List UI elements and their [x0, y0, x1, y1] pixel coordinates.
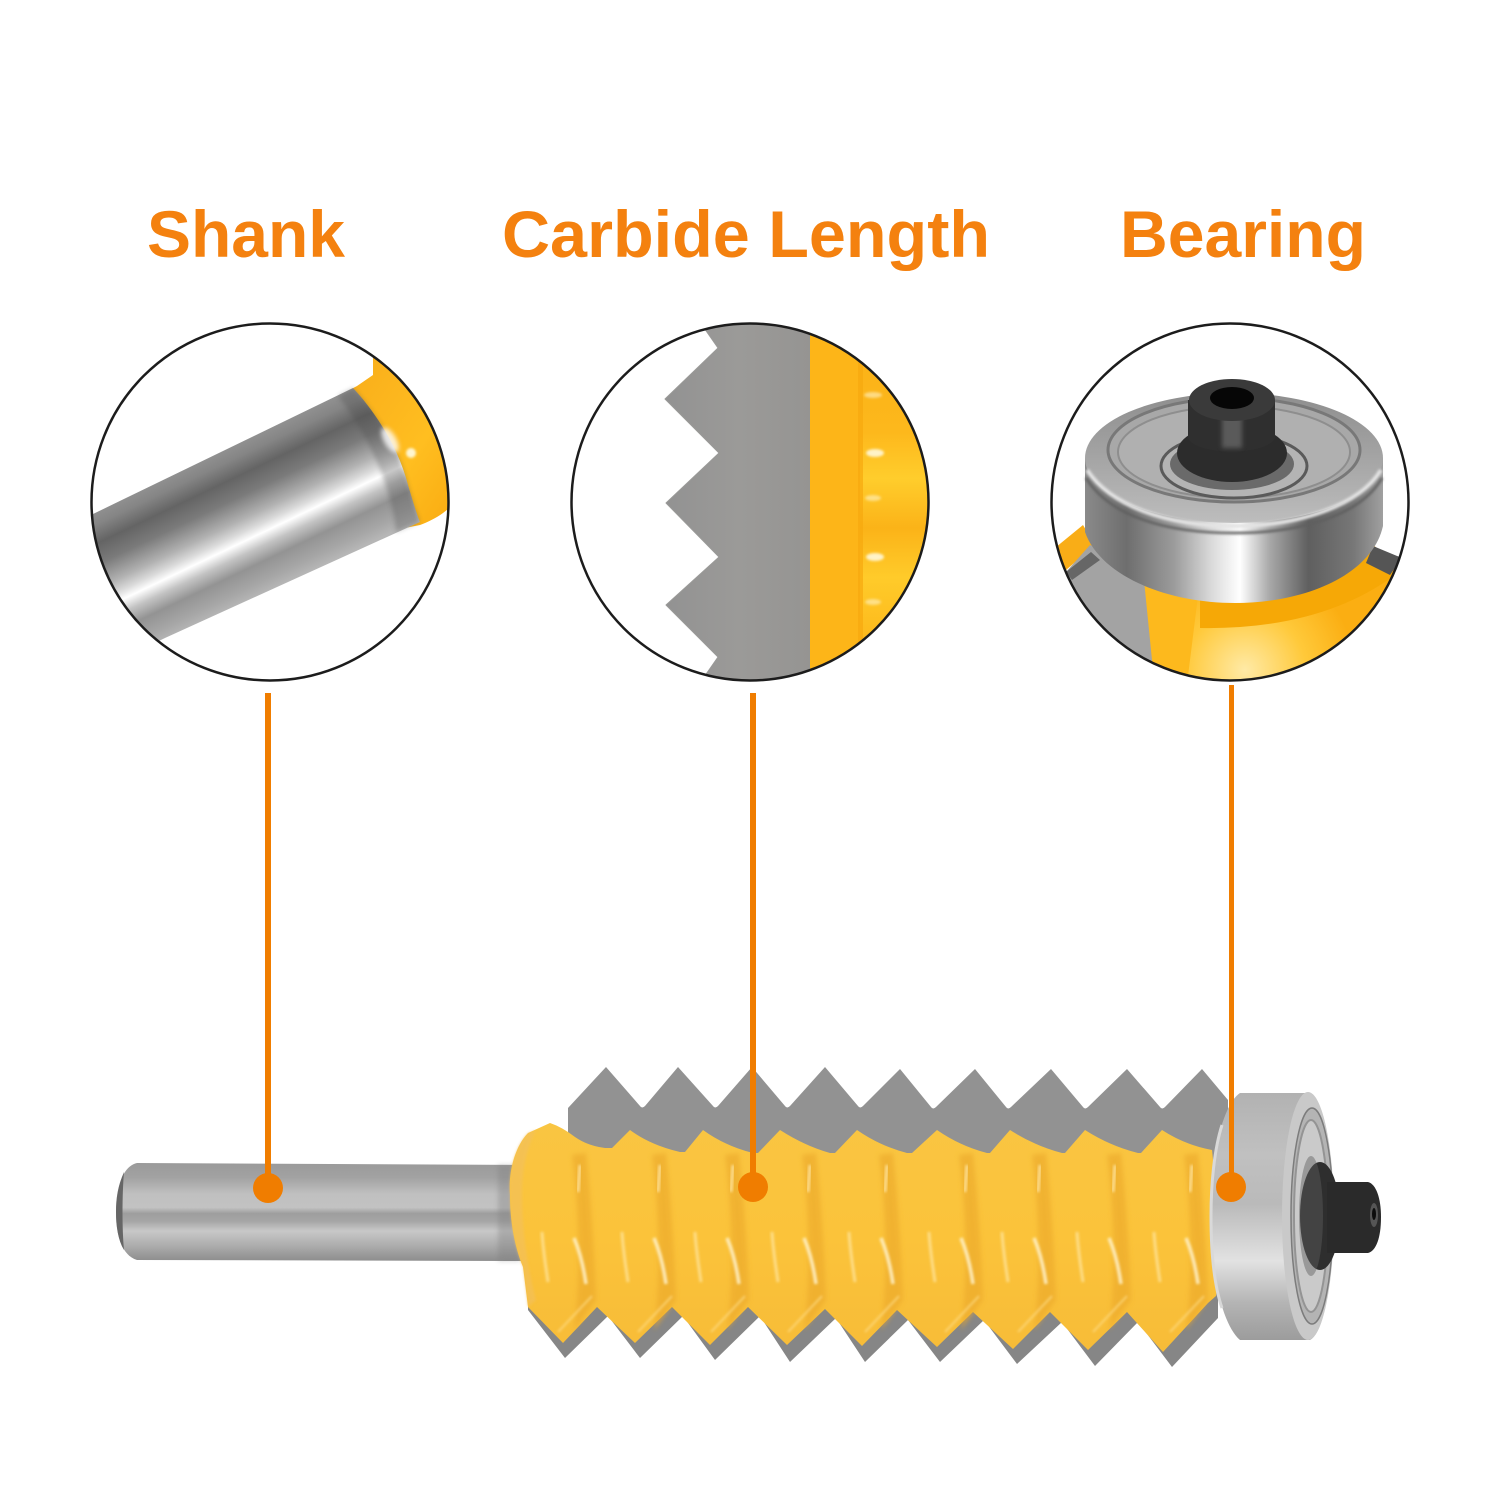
black hub [1300, 1162, 1340, 1270]
highlights [864, 392, 884, 605]
callout line and dot: shank [253, 693, 283, 1203]
heading: Shank: Shank [147, 197, 345, 271]
bearing side wall [1085, 458, 1383, 603]
hex socket [1210, 387, 1254, 409]
carbide teeth [665, 325, 812, 680]
router bit [116, 1067, 1381, 1367]
callout line and dot: carbide length [738, 693, 768, 1202]
detail circle: shank [90, 322, 450, 682]
carbide teeth bottom [528, 1290, 1218, 1367]
bearing face [1282, 1092, 1334, 1340]
cutter ridges and highlights [542, 1148, 1208, 1332]
detail circle: carbide length [572, 320, 935, 685]
infographic canvas [90, 209, 1410, 1367]
callout line and dot: bearing [1216, 685, 1246, 1202]
heading: Carbide Length: Carbide Length [502, 197, 990, 271]
cutter below the bearing [1058, 525, 1092, 570]
carbide teeth top [568, 1067, 1228, 1170]
detail circle: bearing [1050, 324, 1410, 700]
black pin [1327, 1182, 1381, 1253]
yellow coating [810, 335, 860, 669]
bearing face [1085, 393, 1383, 523]
inner race [1161, 434, 1307, 498]
yellow cutter body behind the shank [350, 358, 448, 528]
yellow coated cutter body [510, 1123, 1222, 1352]
steel rod [93, 388, 420, 640]
shank rod [116, 1163, 522, 1261]
black screw base [1177, 435, 1287, 482]
heading: Bearing: Bearing [1120, 197, 1366, 271]
bearing [1210, 1092, 1381, 1340]
